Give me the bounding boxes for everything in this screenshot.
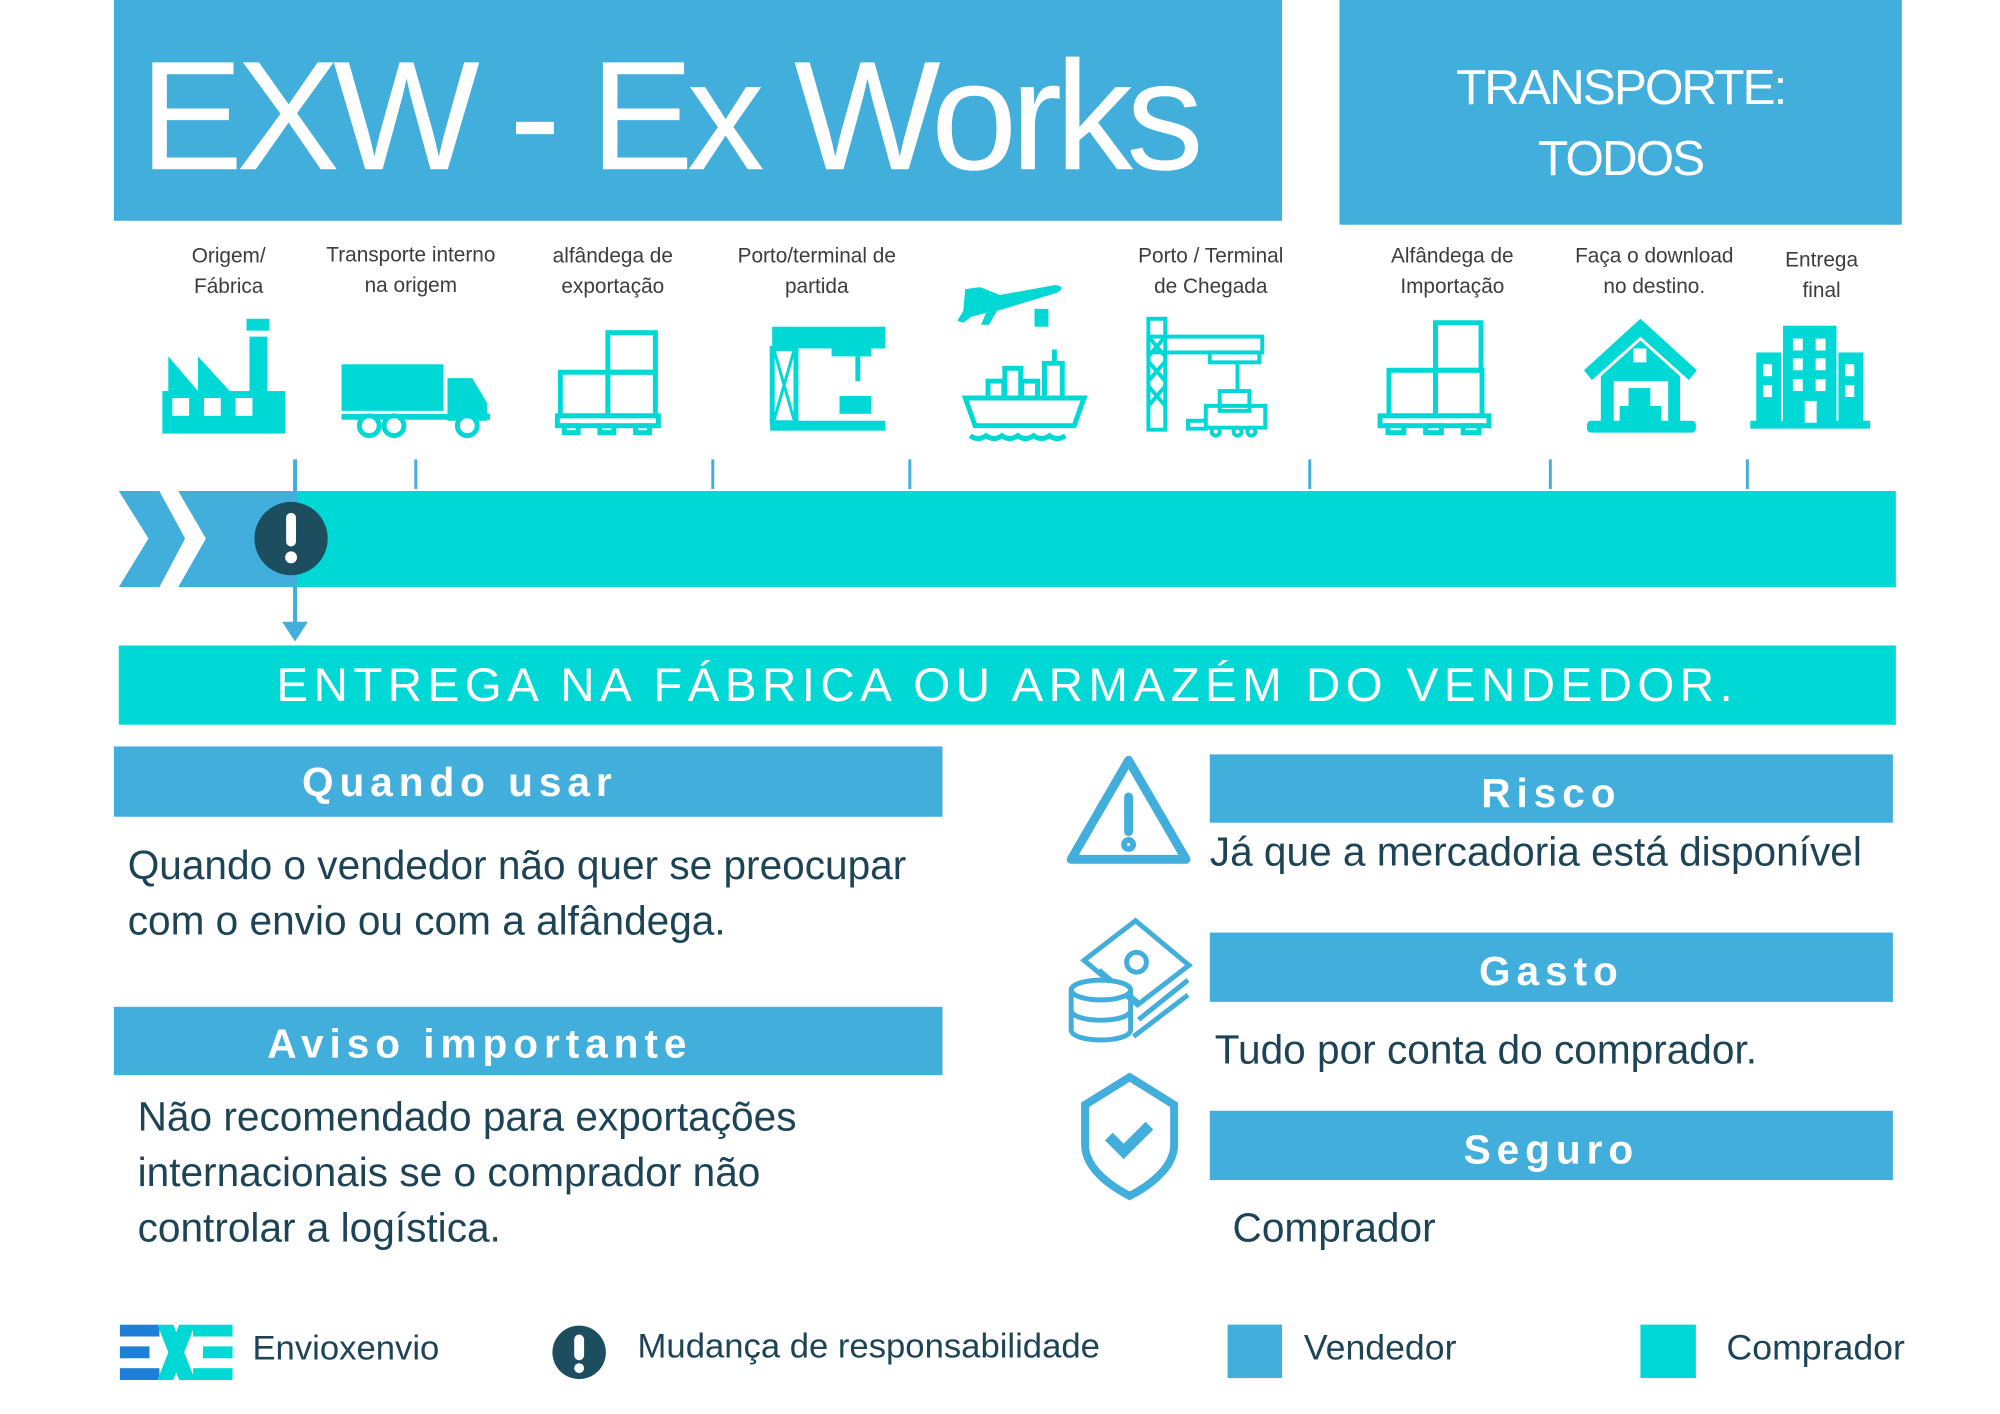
logo: envioxenvio [120,1324,233,1380]
icon: building [1750,326,1870,429]
icon: shield [1085,1077,1174,1196]
text: aviso: internacionais se o comprador não [138,1149,760,1195]
header: quando usar: Quando usar [302,759,618,805]
icon: money [1071,921,1189,1040]
legend: comprador [1640,1325,1696,1378]
label: porto partida [738,245,896,298]
text: aviso: Não recomendado para exportações [138,1094,796,1139]
header: risco: Risco [1481,770,1621,816]
label: alfandega exportacao: alfândega de [553,245,673,267]
title box: EXW - Ex Works [140,30,1197,203]
text: risco: Já que a mercadoria está disponível [1210,829,1862,874]
label: entrega final: final [1803,279,1841,302]
icon: exclamation timeline [254,502,328,575]
label: alfandega importacao [1391,245,1514,298]
header: quando usar [114,746,942,817]
label: transporte interno: na origem [365,274,457,297]
text: quando usar: Quando o vendedor não quer se preocupar [128,842,906,888]
legend: vendedor [1228,1325,1282,1378]
icon: boxes import [1380,323,1489,433]
header: aviso importante [114,1007,942,1075]
legend text: vendedor: Vendedor [1304,1327,1456,1367]
header: gasto [1210,933,1893,1002]
label: entrega final: Entrega [1785,248,1858,271]
transport box: TRANSPORTE: [1456,59,1785,115]
icon: crane [770,327,885,431]
label: transporte interno [326,244,495,297]
transport box: TODOS [1538,131,1703,186]
banner [119,645,1896,725]
text: quando usar [128,842,906,943]
arrow: responsibility change [282,459,308,642]
header: aviso importante: Aviso importante [267,1021,692,1066]
text: quando usar: com o envio ou com a alfândega. [128,898,726,943]
header: risco [1210,754,1893,823]
legend icon: exclamation [552,1326,606,1380]
timeline ticks [416,459,1747,489]
text: seguro: Comprador [1233,1205,1436,1250]
icon: truck [342,364,490,436]
icon: ship [965,349,1084,439]
label: transporte interno: Transporte interno [326,244,495,266]
header: seguro: Seguro [1464,1127,1639,1172]
label: download destino: no destino. [1603,275,1705,298]
transport box [1339,0,1902,225]
label: entrega final [1785,248,1858,302]
label: download destino [1575,245,1733,298]
label: alfandega exportacao [553,245,673,298]
legend text: mudanca: Mudança de responsabilidade [638,1327,1100,1365]
banner: ENTREGA NA FÁBRICA OU ARMAZÉM DO VENDEDOR. [276,659,1738,712]
text: aviso [138,1094,796,1250]
icon: crane arrival [1148,319,1265,436]
timeline bar [119,491,1896,587]
icon: factory [162,319,285,434]
icon: warning [1071,760,1186,859]
label: porto chegada: Porto / Terminal [1138,245,1283,267]
label: origem [192,245,266,298]
label: porto partida: Porto/terminal de [738,245,896,267]
label: alfandega exportacao: exportação [561,275,664,298]
legend [120,1324,1905,1380]
header: gasto: Gasto [1479,948,1624,994]
text: aviso: controlar a logística. [138,1205,501,1250]
text: gasto: Tudo por conta do comprador. [1215,1027,1757,1072]
label: porto chegada: de Chegada [1154,275,1267,298]
icon: boxes pallet [557,333,658,433]
label: porto chegada [1138,245,1283,298]
legend text: comprador: Comprador [1727,1327,1905,1367]
label: alfandega importacao: Importação [1400,275,1504,298]
label: porto partida: partida [785,275,849,298]
label: origem: Origem/ [192,245,266,267]
label: alfandega importacao: Alfândega de [1391,245,1514,267]
icon: airplane [957,285,1061,327]
icon: warehouse [1584,319,1697,433]
header: seguro [1210,1111,1893,1180]
label: download destino: Faça o download [1575,245,1733,267]
legend text: envioxenvio: Envioxenvio [252,1329,439,1367]
label: origem: Fábrica [194,275,263,298]
